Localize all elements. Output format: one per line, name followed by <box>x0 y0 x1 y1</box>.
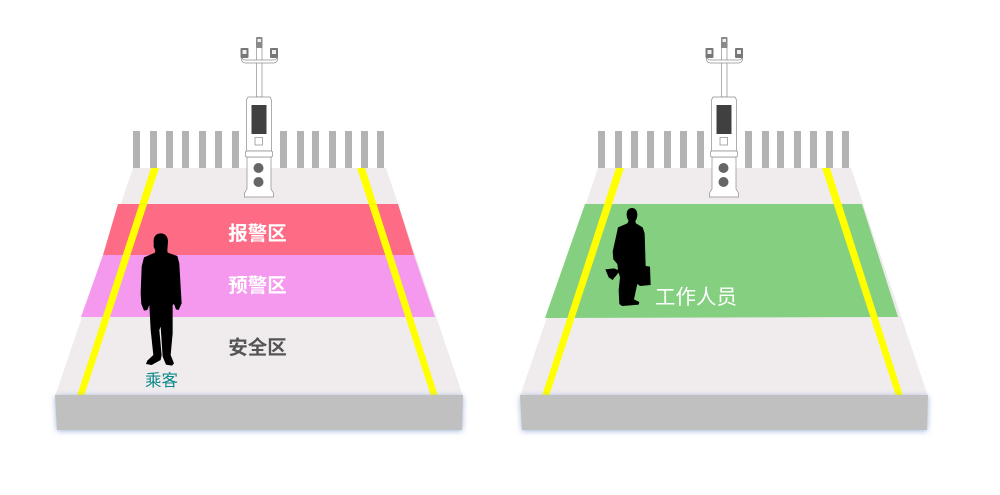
platform edge slab <box>520 395 928 430</box>
fence stripes <box>133 131 384 169</box>
panel: passenger zones platform <box>55 37 463 430</box>
label: safe zone: 安全区 <box>228 336 287 359</box>
icon: staff silhouette with megaphone and briefcase <box>605 208 651 306</box>
label: staff: 工作人员 <box>655 286 737 309</box>
fence stripes <box>598 131 849 169</box>
warning zone band <box>81 255 435 317</box>
platform surface <box>520 168 928 396</box>
label: passenger: 乘客 <box>145 371 178 390</box>
right yellow line <box>357 168 438 396</box>
left yellow line <box>77 168 159 396</box>
label: warning zone: 预警区 <box>228 275 287 297</box>
platform edge slab <box>55 395 463 430</box>
icon: passenger silhouette <box>141 233 182 366</box>
platform surface <box>55 168 463 396</box>
panel: staff zone platform <box>520 37 928 430</box>
icon: gate terminal pole <box>706 37 743 197</box>
staff work zone band <box>545 204 898 318</box>
alarm zone band <box>103 204 414 255</box>
icon: gate terminal pole <box>240 37 278 197</box>
right yellow line <box>822 168 903 396</box>
label: alarm zone: 报警区 <box>228 223 287 245</box>
left yellow line <box>542 168 624 396</box>
